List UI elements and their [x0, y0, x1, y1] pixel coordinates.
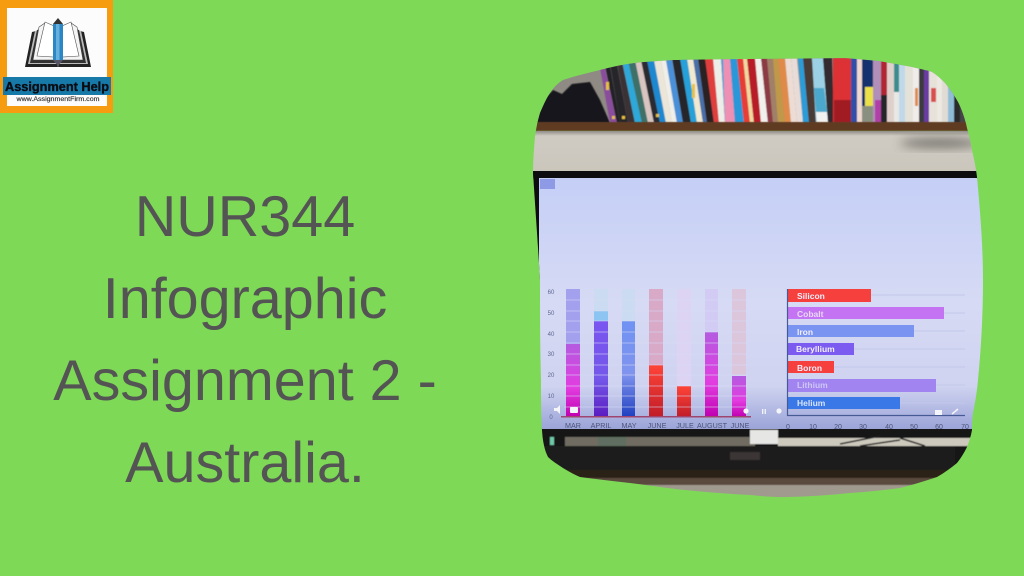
x axis labels: 10: [809, 424, 817, 431]
column tracks: [566, 289, 746, 386]
x axis labels: 40: [885, 424, 893, 431]
bar: Silicon: [787, 289, 871, 302]
bar: Iron: Iron: [797, 327, 813, 337]
bar: Boron: Boron: [797, 363, 822, 373]
logo: Assignment Help badge: [0, 0, 113, 113]
bar: Lithium: [787, 379, 936, 392]
month labels: AUGUST: [697, 421, 728, 430]
month labels: JUNE: [731, 421, 750, 430]
icon: open book with pencil: [25, 18, 91, 67]
y axis labels: 30: [548, 352, 555, 358]
x axis labels: 30: [859, 424, 867, 431]
y axis labels: 50: [548, 311, 555, 317]
shelf backdrop: [530, 55, 985, 125]
title: Assignment 2 -: [53, 349, 437, 413]
bar: Silicon: Silicon: [797, 291, 825, 301]
video player controls: [554, 405, 958, 415]
bar grid lines: [834, 294, 965, 386]
month labels: JULE: [676, 421, 694, 430]
bar: Lithium: Lithium: [797, 380, 828, 390]
column values: [566, 311, 746, 417]
TV frame: [533, 171, 983, 179]
logo url: www.AssignmentFirm.com: [15, 96, 100, 103]
y axis labels: 20: [548, 373, 555, 379]
bar: Cobalt: Cobalt: [797, 309, 824, 319]
logo name: Assignment Help: [5, 79, 109, 94]
column chart baseline: [561, 416, 751, 418]
x axis labels: 70: [961, 424, 969, 431]
screen back button: [540, 179, 555, 189]
shelf plank: [530, 122, 985, 131]
bar chart: [786, 289, 969, 431]
bar: Cobalt: [787, 307, 944, 319]
y axis labels: 60: [548, 290, 555, 296]
y axis labels: 40: [548, 332, 555, 338]
x axis labels: 20: [834, 424, 842, 431]
wall behind TV: [530, 131, 985, 172]
column segment lines: [564, 300, 748, 407]
y axis labels: 10: [548, 394, 555, 400]
camera on shelf: [536, 82, 610, 123]
x axis labels: 60: [935, 424, 943, 431]
y axis labels: 0: [549, 415, 553, 421]
logo band: [3, 77, 111, 95]
title: [53, 185, 437, 495]
bookshelf with DVDs: [600, 58, 968, 123]
disc label details: [606, 82, 695, 119]
month labels: MAY: [621, 421, 637, 430]
TV screen: [539, 178, 984, 429]
month labels: MAR: [565, 421, 581, 430]
column chart: [548, 289, 751, 430]
month labels: [566, 423, 750, 428]
x axis labels: 0: [786, 424, 790, 431]
bar: Helium: Helium: [797, 398, 826, 408]
x axis labels: 50: [910, 424, 918, 431]
photo: blob-cropped TV with charts under bookshelf: [533, 58, 983, 497]
bar: Beryllium: [787, 343, 854, 355]
bar chart axes: [788, 289, 965, 416]
title: Australia.: [125, 431, 365, 495]
month labels: APRIL: [591, 421, 611, 430]
bar: Beryllium: Beryllium: [796, 344, 835, 354]
title: NUR344: [135, 185, 355, 249]
bar: Helium: [787, 397, 900, 409]
wall shadow: [900, 138, 980, 148]
bar: Boron: [787, 361, 834, 373]
TV stand and soundbar: [542, 428, 972, 497]
bar: Iron: [787, 325, 914, 337]
y axis labels: [548, 290, 555, 421]
month labels: JUNE: [648, 421, 667, 430]
title: Infographic: [103, 267, 387, 331]
x axis labels: [786, 424, 969, 429]
